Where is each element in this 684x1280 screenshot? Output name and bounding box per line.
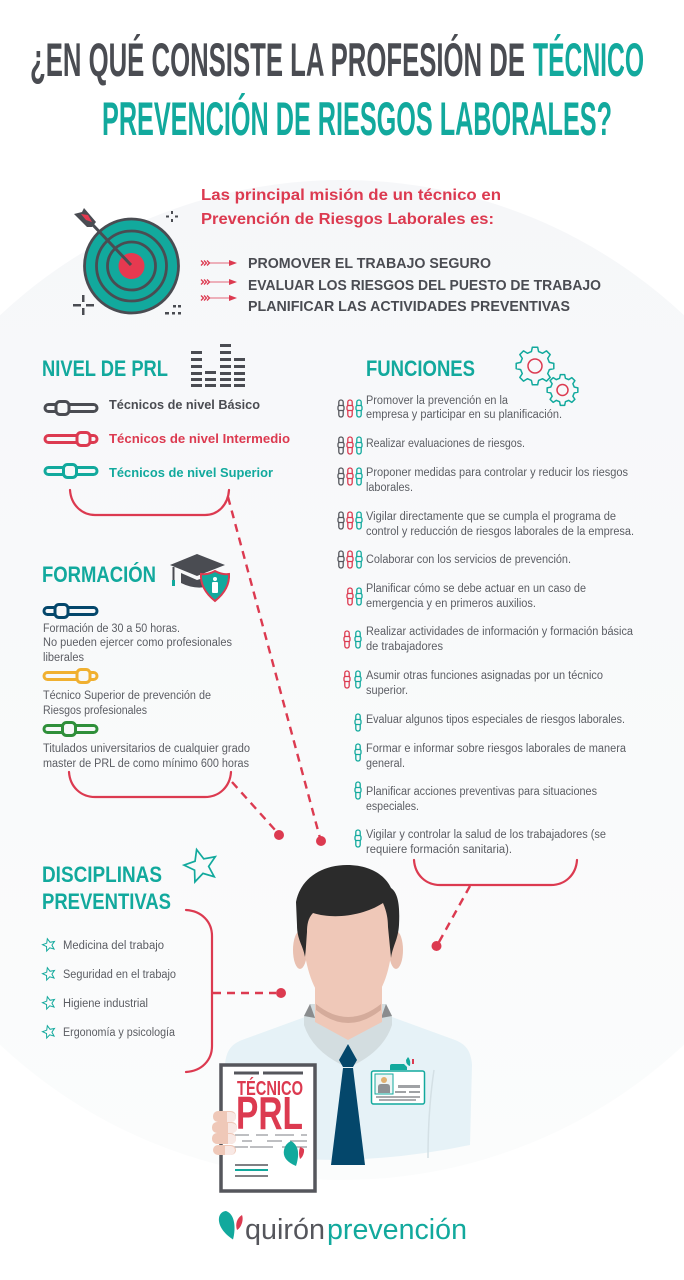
functions list: emergencia y en primeros auxilios.: [366, 598, 536, 610]
functions list: [338, 395, 634, 856]
icon: target with arrow: [73, 208, 181, 315]
connector: disciplinas to person: [186, 910, 286, 1072]
training list: Formación de 30 a 50 horas.: [43, 623, 180, 635]
functions list: Asumir otras funciones asignadas por un técnico: [366, 670, 603, 682]
functions list: control y reducción de riesgos laborales de la empresa.: [366, 526, 634, 538]
level list: Técnicos de nivel Intermedio: [109, 432, 290, 446]
disciplines list: Seguridad en el trabajo: [63, 969, 176, 981]
functions list: general.: [366, 758, 405, 770]
functions list: Realizar actividades de información y formación básica: [366, 626, 634, 638]
icon: graduation cap and shield: [170, 554, 229, 601]
functions list: Evaluar algunos tipos especiales de riesgos laborales.: [366, 714, 625, 726]
illustration: person: [222, 865, 472, 1165]
heading: disciplinas preventivas: DISCIPLINAS: [42, 862, 162, 887]
level list: [45, 398, 290, 480]
training list: [43, 604, 250, 770]
mission heading: Prevención de Riesgos Laborales es:: [201, 211, 494, 228]
icon: big star: [181, 845, 220, 883]
mission list with arrows: PLANIFICAR LAS ACTIVIDADES PREVENTIVAS: [248, 299, 570, 315]
mission heading: Las principal misión de un técnico en: [201, 187, 501, 204]
functions list: de trabajadores: [366, 641, 443, 653]
heading: funciones: FUNCIONES: [366, 356, 475, 381]
functions list: Planificar cómo se debe actuar en un caso de: [366, 583, 586, 595]
functions list: Promover la prevención en la: [366, 395, 509, 407]
functions list: Vigilar y controlar la salud de los trabajadores (se: [366, 829, 606, 841]
mission list with arrows: [201, 256, 601, 315]
functions list: requiere formación sanitaria).: [366, 844, 512, 856]
training list: Técnico Superior de prevención de: [43, 690, 211, 702]
heading: formación: FORMACIÓN: [42, 562, 156, 587]
functions list: empresa y participar en su planificación.: [366, 409, 562, 421]
background circle: [0, 180, 684, 1180]
functions list: Vigilar directamente que se cumpla el programa de: [366, 511, 616, 523]
illustration: document técnico PRL: TÉCNICO: [237, 1077, 303, 1100]
mission heading: [201, 187, 501, 228]
training list: No pueden ejercer como profesionales: [43, 637, 232, 649]
functions list: Proponer medidas para controlar y reducir los riesgos: [366, 467, 628, 479]
functions list: Colaborar con los servicios de prevención.: [366, 554, 571, 566]
mission list with arrows: PROMOVER EL TRABAJO SEGURO: [248, 256, 491, 272]
functions list: Formar e informar sobre riesgos laborales de manera: [366, 743, 627, 755]
connector: formación to person: [69, 772, 284, 840]
icon: id badge: [372, 1057, 424, 1104]
disciplines list: Ergonomía y psicología: [63, 1027, 176, 1039]
logo: quirón prevención: [219, 1211, 467, 1246]
functions list: especiales.: [366, 801, 419, 813]
level list: Técnicos de nivel Básico: [109, 398, 260, 412]
training list: master de PRL de como mínimo 600 horas: [43, 758, 249, 770]
level list: Técnicos de nivel Superior: [109, 466, 273, 480]
logo: quirón prevención: prevención: [327, 1214, 467, 1246]
functions list: laborales.: [366, 482, 413, 494]
training list: Titulados universitarios de cualquier grado: [43, 743, 250, 755]
connector: funciones to person: [414, 860, 577, 951]
mission list with arrows: EVALUAR LOS RIESGOS DEL PUESTO DE TRABAJO: [248, 278, 601, 294]
connector: nivel to person: [70, 490, 326, 846]
heading: nivel de PRL: NIVEL DE PRL: [42, 356, 168, 381]
icon: gears: [516, 347, 578, 405]
training list: liberales: [43, 652, 84, 664]
heading: disciplinas preventivas: [42, 862, 171, 914]
heading: disciplinas preventivas: PREVENTIVAS: [42, 889, 171, 914]
icon: equalizer: [191, 344, 245, 387]
logo: quirón prevención: quirón: [245, 1214, 325, 1246]
illustration: document técnico PRL: PRL: [236, 1087, 303, 1139]
illustration: document técnico PRL: [221, 1065, 315, 1191]
functions list: Planificar acciones preventivas para situaciones: [366, 786, 597, 798]
illustration: fingers: [212, 1111, 237, 1155]
training list: Riesgos profesionales: [43, 705, 147, 717]
functions list: Realizar evaluaciones de riesgos.: [366, 438, 525, 450]
disciplines list: [41, 937, 176, 1039]
functions list: superior.: [366, 685, 408, 697]
disciplines list: Higiene industrial: [63, 998, 148, 1010]
disciplines list: Medicina del trabajo: [63, 940, 164, 952]
title: [30, 33, 644, 145]
